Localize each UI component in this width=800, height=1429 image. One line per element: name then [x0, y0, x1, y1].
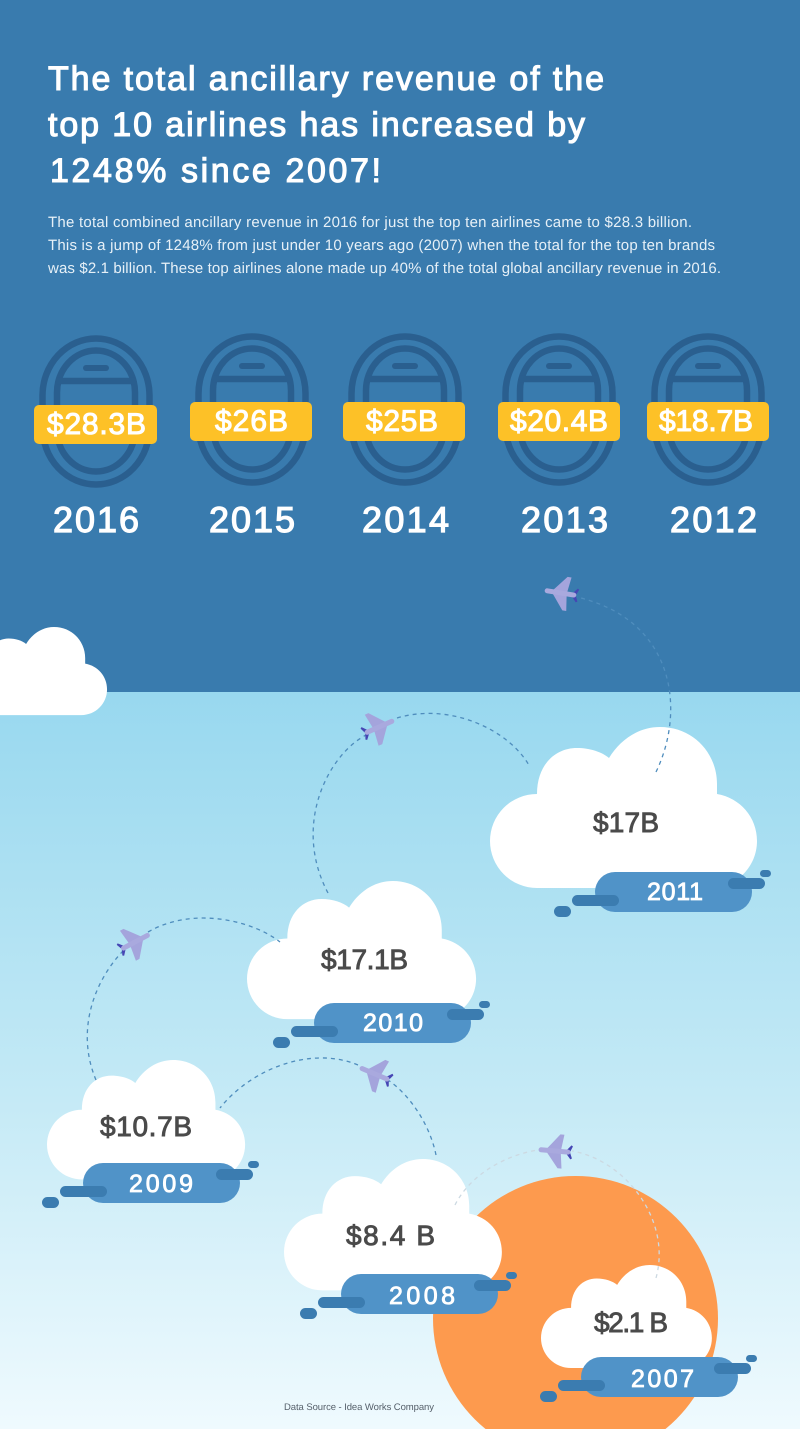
cloud: 2009: $10.7B: [100, 1111, 192, 1142]
title: top 10 airlines has increased by: [48, 106, 585, 144]
plane window: 2013: 2013: [521, 499, 608, 540]
cloud: 2008: $8.4 B: [346, 1220, 435, 1251]
intro paragraph: This is a jump of 1248% from just under 10 years ago (2007) when the total for the top ten brands: [48, 237, 715, 254]
cloud: 2010: $17.1B: [321, 944, 408, 975]
flight path and plane: 2010 to 2011: [313, 706, 530, 893]
cloud: 2011: 2011: [647, 878, 703, 906]
plane window: 2015: [190, 336, 312, 540]
cloud: 2007: $2.1 B: [594, 1307, 668, 1338]
intro paragraph: [47, 214, 721, 277]
plane window: 2012: 2012: [670, 499, 757, 540]
plane window: 2014: $25B: [366, 405, 438, 438]
plane window: 2016: 2016: [53, 499, 139, 540]
cloud: 2008: 2008: [389, 1282, 455, 1310]
title: [48, 60, 604, 190]
flight path and plane: 2007 to 2008: [455, 1133, 659, 1278]
cloud: 2007: 2007: [631, 1365, 694, 1393]
title: 1248% since 2007!: [50, 152, 381, 190]
background: dark blue upper sky: [0, 0, 800, 692]
flight path and plane: 2008 to 2009: [220, 1053, 436, 1155]
plane window: 2016: [34, 338, 157, 540]
plane window: 2013: [498, 336, 620, 540]
intro paragraph: The total combined ancillary revenue in 2016 for just the top ten airlines came to $28.3 billion.: [48, 214, 692, 231]
cloud: 2008: [284, 1159, 517, 1319]
cloud: 2009: 2009: [129, 1170, 193, 1198]
cloud: 2010: 2010: [363, 1009, 423, 1037]
cloud: 2009: [42, 1060, 259, 1208]
flight path and plane: 2009 to 2010: [87, 918, 280, 1080]
plane window: 2014: 2014: [362, 499, 449, 540]
intro paragraph: was $2.1 billion. These top airlines alone made up 40% of the total global ancillary revenue in 2016.: [47, 260, 721, 277]
title: The total ancillary revenue of the: [48, 60, 604, 98]
flight path and plane: 2011 to 2012: [545, 574, 671, 772]
data source note: Data Source - Idea Works Company: [284, 1402, 434, 1413]
plane window: 2015: 2015: [209, 499, 295, 540]
background: light sky gradient: [0, 692, 800, 1429]
plane window: 2013: $20.4B: [510, 405, 608, 438]
sun: [433, 1176, 718, 1429]
plane window: 2015: $26B: [215, 405, 288, 438]
plane window: 2012: [647, 336, 769, 540]
cloud: 2011: [490, 727, 771, 917]
plane window: 2016: $28.3B: [47, 408, 146, 441]
plane window: 2012: $18.7B: [659, 405, 753, 438]
decorative cloud on horizon: [0, 627, 107, 715]
cloud: 2010: [247, 881, 490, 1048]
cloud: 2011: $17B: [593, 807, 659, 838]
cloud: 2007: [540, 1265, 757, 1402]
plane window: 2014: [343, 336, 465, 540]
